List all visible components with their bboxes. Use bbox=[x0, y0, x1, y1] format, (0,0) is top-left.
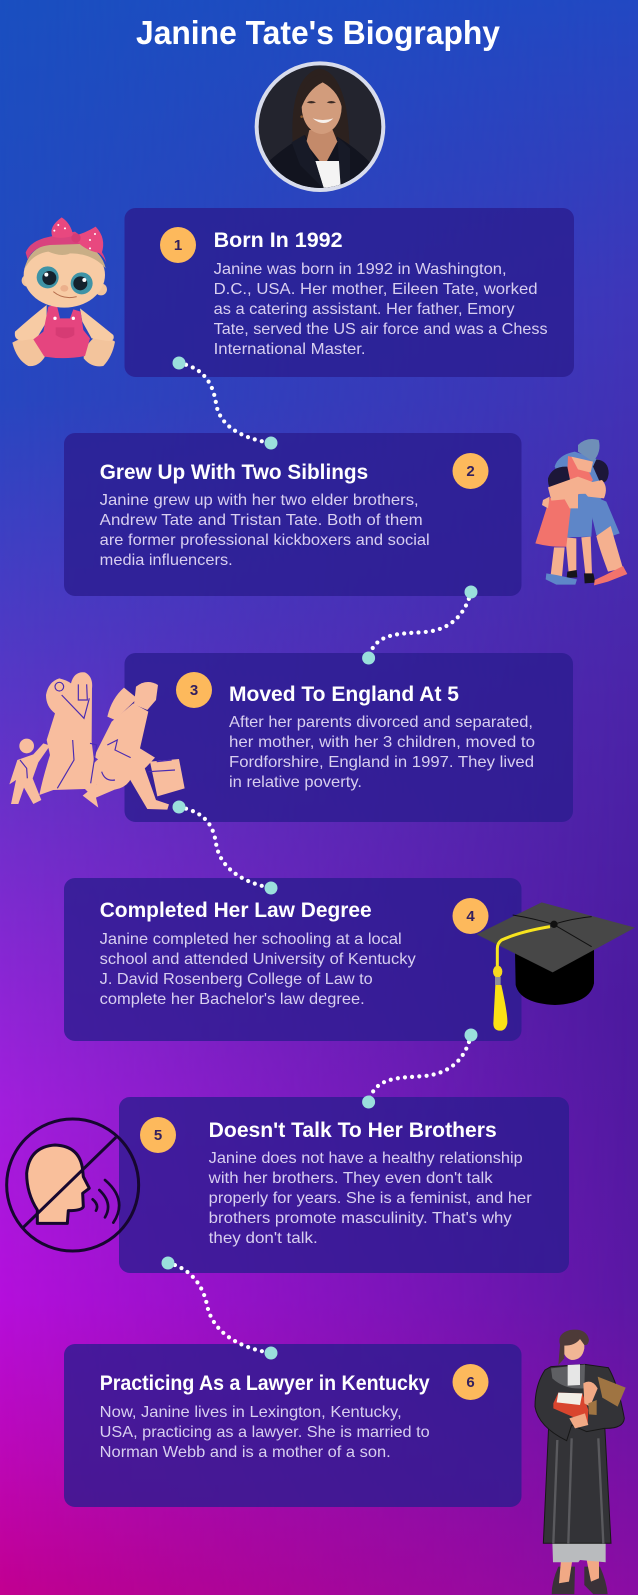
body text: are former professional kickboxers and social bbox=[100, 532, 430, 549]
connector: 4 to 5 bbox=[362, 1028, 478, 1108]
body text: Now, Janine lives in Lexington, Kentucky, bbox=[100, 1404, 402, 1421]
body text: International Master. bbox=[214, 341, 366, 358]
panel background bbox=[124, 653, 573, 822]
body text: her mother, with her 3 children, moved to bbox=[229, 734, 535, 751]
heading: Born In 1992 bbox=[214, 229, 343, 252]
panel: practicing as a lawyer bbox=[64, 1344, 522, 1507]
panel: moved to england bbox=[124, 653, 573, 822]
heading: Doesn't Talk To Her Brothers bbox=[209, 1119, 497, 1142]
body text: media influencers. bbox=[100, 552, 233, 569]
illustration: graduation cap bbox=[477, 902, 635, 1031]
body text bbox=[100, 1404, 430, 1461]
panel: born in 1992 bbox=[124, 208, 574, 377]
body text: school and attended University of Kentucky bbox=[100, 951, 416, 968]
badge: 4: 4 bbox=[466, 908, 475, 925]
body text: Tate, served the US air force and was a Chess bbox=[214, 321, 548, 338]
body text: Janine completed her schooling at a local bbox=[100, 931, 402, 948]
body text: J. David Rosenberg College of Law to bbox=[100, 971, 373, 988]
connector: 3 to 4 bbox=[172, 800, 278, 894]
panel: doesn't talk to her brothers bbox=[119, 1097, 569, 1273]
body text: After her parents divorced and separated, bbox=[229, 714, 533, 731]
connector: 1 to 2 bbox=[172, 356, 278, 450]
body text: Norman Webb and is a mother of a son. bbox=[100, 1444, 391, 1461]
panel background bbox=[124, 208, 574, 377]
heading: Completed Her Law Degree bbox=[100, 899, 372, 922]
body text: with her brothers. They even don't talk bbox=[208, 1170, 494, 1187]
panel: completed her law degree bbox=[64, 878, 522, 1041]
illustration: baby bbox=[12, 217, 115, 366]
body text bbox=[100, 492, 430, 569]
illustration: lawyer bbox=[535, 1330, 626, 1594]
badge: 2 bbox=[452, 453, 488, 489]
panel background bbox=[119, 1097, 569, 1273]
heading: Moved To England At 5 bbox=[229, 683, 459, 706]
body text: in relative poverty. bbox=[229, 774, 362, 791]
badge: 6 bbox=[452, 1364, 488, 1400]
body text: brothers promote masculinity. That's why bbox=[209, 1210, 512, 1227]
badge: 3: 3 bbox=[190, 682, 198, 699]
portrait photo bbox=[254, 61, 386, 192]
badge: 3 bbox=[176, 672, 212, 708]
body text: Fordforshire, England in 1997. They lived bbox=[229, 754, 534, 771]
badge: 2: 2 bbox=[466, 463, 475, 480]
body text: properly for years. She is a feminist, and her bbox=[209, 1190, 532, 1207]
badge: 1: 1 bbox=[174, 237, 182, 254]
body text bbox=[214, 261, 548, 358]
illustration: hugging children bbox=[535, 439, 627, 585]
body text: D.C., USA. Her mother, Eileen Tate, worked bbox=[214, 281, 538, 298]
badge: 6: 6 bbox=[466, 1374, 475, 1391]
body text bbox=[100, 931, 416, 1008]
badge: 1 bbox=[160, 227, 196, 263]
body text: Janine does not have a healthy relationship bbox=[209, 1150, 523, 1167]
connector: 2 to 3 bbox=[362, 586, 478, 664]
body text: Janine was born in 1992 in Washington, bbox=[214, 261, 507, 278]
badge: 4 bbox=[452, 898, 488, 934]
heading: Practicing As a Lawyer in Kentucky bbox=[100, 1372, 430, 1395]
panel: grew up with two siblings bbox=[64, 433, 522, 596]
panel background bbox=[64, 1344, 522, 1507]
body text: complete her Bachelor's law degree. bbox=[100, 991, 365, 1008]
panel background bbox=[64, 878, 522, 1041]
body text: as a catering assistant. Her father, Emory bbox=[214, 301, 515, 318]
badge: 5: 5 bbox=[154, 1127, 162, 1144]
body text bbox=[229, 714, 535, 791]
illustration: family moving bbox=[9, 672, 185, 810]
body text: Janine grew up with her two elder brothers, bbox=[100, 492, 419, 509]
body text bbox=[208, 1150, 532, 1247]
body text: USA, practicing as a lawyer. She is married to bbox=[100, 1424, 430, 1441]
panel background bbox=[64, 433, 522, 596]
heading: Grew Up With Two Siblings bbox=[100, 461, 368, 484]
body text: Andrew Tate and Tristan Tate. Both of them bbox=[100, 512, 423, 529]
title: Janine Tate's Biography bbox=[136, 14, 501, 51]
icon: no talking bbox=[7, 1119, 139, 1251]
badge: 5 bbox=[140, 1117, 176, 1153]
body text: they don't talk. bbox=[209, 1230, 318, 1247]
connector: 5 to 6 bbox=[162, 1256, 278, 1360]
